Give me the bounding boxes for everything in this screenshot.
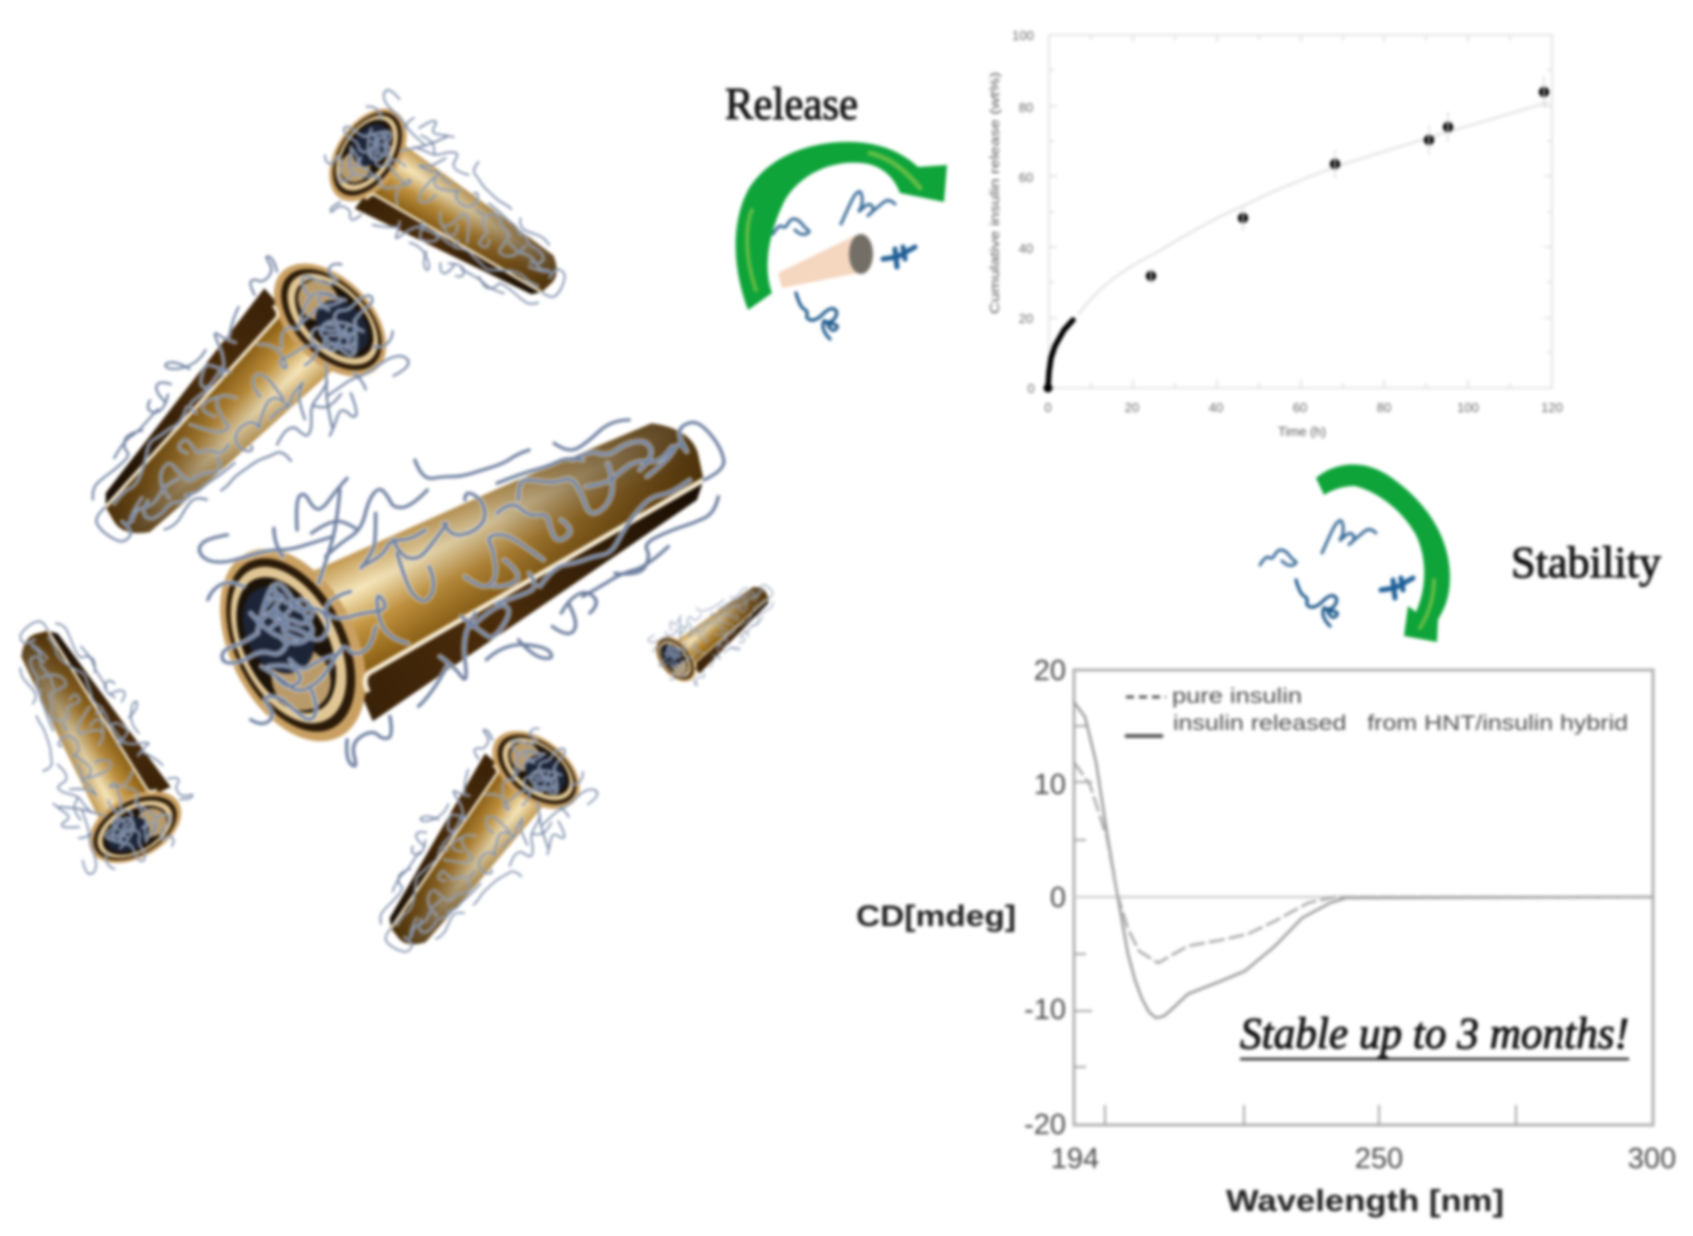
plot frame: [1049, 35, 1552, 388]
x tick labels: 100: [1457, 400, 1479, 415]
x tick labels: [1044, 400, 1563, 415]
y tick labels: -20: [1024, 1109, 1066, 1141]
arrow: release: [736, 142, 947, 310]
nanotube: far left: [0, 550, 296, 942]
chart: cumulative insulin release: [987, 28, 1563, 439]
y tick labels: 10: [1034, 769, 1066, 801]
heading: Release: Release: [725, 78, 858, 129]
nanotube: top: [227, 16, 638, 415]
y axis title: CD[mdeg]: [856, 900, 1016, 933]
x tick labels: 0: [1044, 400, 1052, 415]
fit curve: [1078, 102, 1549, 315]
x axis title: Wavelength [nm]: [1226, 1183, 1504, 1218]
x tick labels: 250: [1355, 1143, 1403, 1175]
nanotube: bottom: [276, 628, 670, 1029]
y tick labels: 80: [1019, 100, 1033, 115]
y tick labels: 20: [1034, 655, 1066, 687]
nanotube: upper left: [0, 114, 508, 659]
x tick labels: 40: [1209, 400, 1223, 415]
x tick labels: 80: [1377, 400, 1391, 415]
heading: Stability: Stability: [1511, 538, 1661, 587]
nanotube: large central: [60, 209, 863, 977]
y tick labels: 40: [1019, 241, 1033, 256]
chart: circular dichroism spectrum: [856, 655, 1676, 1218]
y tick labels: 100: [1012, 28, 1034, 43]
x tick labels: 300: [1628, 1143, 1676, 1175]
ticks: [1074, 726, 1516, 1125]
early time data: [1048, 320, 1073, 388]
curve: pure insulin: [1074, 762, 1653, 963]
y tick labels: 0: [1027, 381, 1035, 396]
x tick labels: [1051, 1143, 1676, 1175]
x tick labels: 120: [1541, 400, 1563, 415]
y tick labels: [1024, 655, 1066, 1141]
legend: pure insulin: [1172, 685, 1302, 708]
x tick labels: 20: [1125, 400, 1139, 415]
x tick labels: 60: [1293, 400, 1307, 415]
error bars: [1151, 76, 1544, 284]
data points: [1044, 87, 1549, 393]
icon: open nanotube releasing insulin: [773, 192, 915, 339]
x axis title: Time (h): [1278, 424, 1326, 439]
callout: stable up to 3 months: Stable up to 3 months!: [1240, 1009, 1629, 1058]
icon: insulin molecules: [1260, 521, 1413, 626]
y axis title: Cumulative insulin release (wt%): [987, 72, 1002, 314]
legend: [1125, 685, 1628, 736]
arrow: stability: [1316, 464, 1450, 642]
y tick labels: 60: [1019, 170, 1033, 185]
plot frame: [1074, 670, 1653, 1125]
x tick labels: 194: [1051, 1143, 1099, 1175]
legend: insulin released from HNT/insulin hybrid: [1173, 712, 1628, 735]
zero line: [1074, 896, 1653, 898]
curve: released insulin: [1074, 702, 1653, 1018]
y tick labels: [1012, 28, 1035, 396]
y tick labels: -10: [1024, 994, 1066, 1026]
nanotube: small right: [611, 536, 818, 740]
y tick labels: 0: [1050, 882, 1066, 914]
y tick labels: 20: [1019, 311, 1033, 326]
